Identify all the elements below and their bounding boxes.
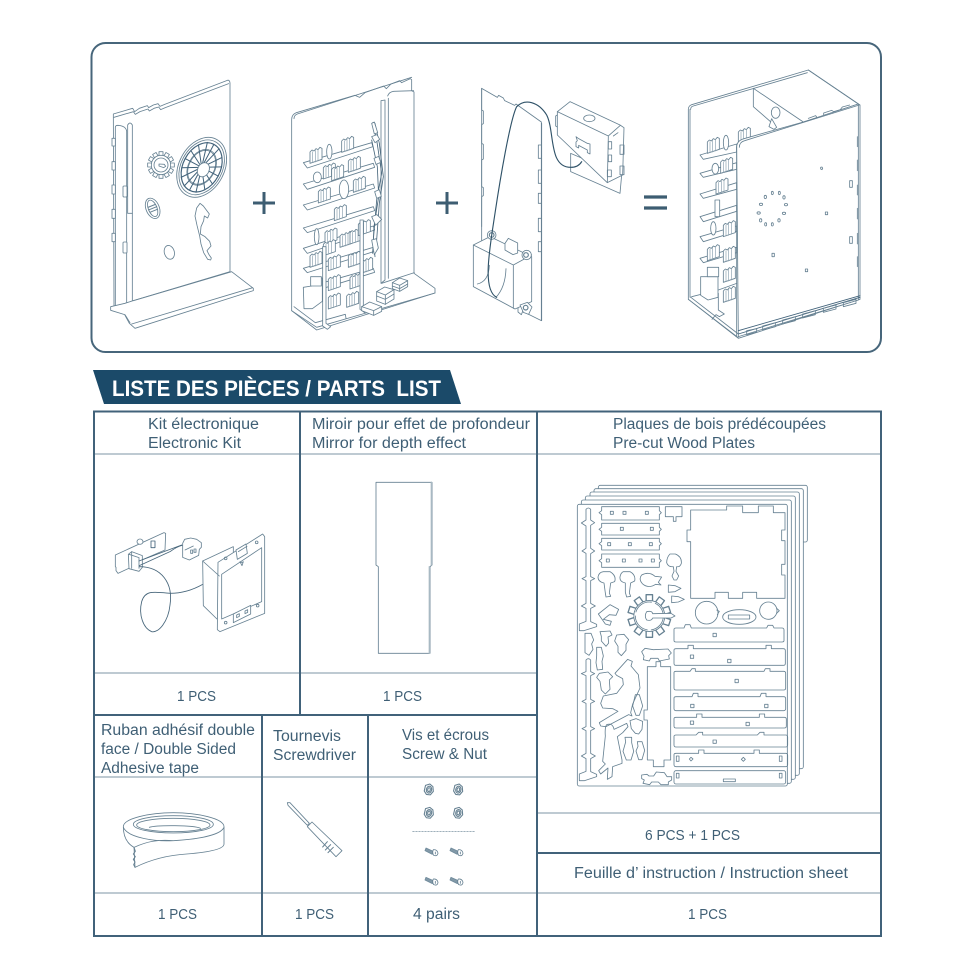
quantity: wood plates: 6 PCS + 1 PCS [645,828,740,844]
quantity: screwdriver: 1 PCS [295,907,334,923]
label: wood plates [613,416,826,452]
label: mirror: Miroir pour effet de profondeur [312,416,530,433]
label: screws and nuts [402,727,489,763]
cell: mirror [312,416,530,705]
parts list table [94,411,881,936]
label: screws and nuts: Screw & Nut [402,746,488,763]
battery box [473,237,532,309]
label: adhesive tape: face / Double Sided [101,741,236,758]
plus sign 1 [253,192,275,214]
figures [599,659,640,727]
illustration: assembled box [688,70,860,338]
cell: electronic kit [115,416,265,705]
assembly panel [92,43,881,352]
illustration: electronic kit [115,533,265,632]
illustration: back plate with gear and dial [111,80,253,328]
section heading banner: LISTE DES PIÈCES / PARTS LIST [112,376,442,401]
illustration: wood plates [577,485,807,786]
equals sign [644,197,667,208]
gear [628,595,671,637]
top box lower flap [571,153,622,193]
label: electronic kit: Electronic Kit [148,435,242,452]
quantity: adhesive tape: 1 PCS [158,907,197,923]
rails [579,508,597,631]
label: wood plates: Plaques de bois prédécoupées [613,416,826,433]
quantity: screws and nuts: 4 pairs [413,906,460,923]
large square panel [687,506,785,598]
dial [167,129,237,206]
label: wood plates: Pre-cut Wood Plates [613,435,755,452]
illustration: bookshelf plate [292,77,435,330]
quantity: instruction sheet: 1 PCS [688,907,727,923]
quantity: electronic kit: 1 PCS [177,689,216,705]
label: electronic kit: Kit électronique [148,416,259,433]
circles and oval [695,601,718,624]
label: screwdriver: Tournevis [273,728,341,745]
section heading banner [93,370,461,404]
label: adhesive tape [101,722,255,777]
books [310,147,322,163]
cell: screwdriver [273,728,356,923]
label: instruction sheet: Feuille d’ instruction / Instruction sheet [574,865,849,882]
ring of holes [757,191,788,226]
cell: screws and nuts [402,727,489,923]
gear [148,152,174,178]
small boxes [392,278,408,291]
label: screwdriver [273,728,356,764]
front side panel [737,104,858,337]
label: mirror [312,416,530,452]
label: electronic kit [148,416,259,452]
slot ellipses [142,196,163,221]
shelves [303,143,375,293]
cat silhouette [195,203,211,260]
cell: wood plates [577,416,826,844]
shelves [700,144,737,263]
label: screwdriver: Screwdriver [273,747,356,764]
illustration: nuts and screws [413,784,475,885]
cell: instruction sheet [574,865,849,923]
label: adhesive tape: Ruban adhésif double [101,722,255,739]
plus sign 2 [436,192,458,214]
long bars [674,625,784,642]
uprights [323,220,368,329]
illustration: screwdriver [287,803,342,857]
label: mirror: Mirror for depth effect [312,435,467,452]
cell: adhesive tape [101,722,255,923]
quantity: mirror: 1 PCS [383,689,422,705]
wire [488,102,582,297]
figure chain [372,123,383,257]
small pieces [598,554,681,597]
top box [557,102,624,183]
illustration: tape roll [123,813,224,867]
label: adhesive tape: Adhesive tape [101,760,199,777]
illustration: back panel with electronics [473,88,624,321]
label: screws and nuts: Vis et écrous [402,727,489,744]
illustration: mirror [376,482,432,653]
slatted rectangles [599,507,661,567]
